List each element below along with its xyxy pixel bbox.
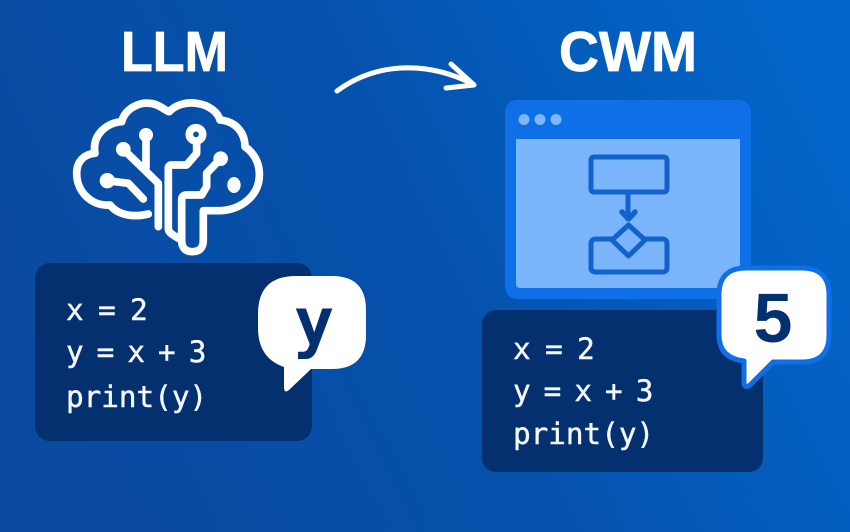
panel: app window [505, 100, 751, 299]
panel: CWM code [482, 310, 763, 472]
panel: LLM code [35, 263, 312, 441]
heading: LLM: LLM [121, 20, 228, 84]
arrow: LLM to CWM [337, 64, 474, 91]
heading: CWM: CWM [559, 20, 697, 84]
callout: y: y [294, 283, 334, 361]
callout: 5 [719, 268, 829, 386]
callout: y [258, 276, 366, 391]
code text: LLM: x = 2 [66, 293, 148, 327]
window content area [516, 139, 740, 288]
code text: CWM [513, 332, 654, 451]
code text: LLM [66, 293, 207, 414]
code text: LLM: y = x + 3 [66, 335, 206, 369]
code text: LLM: print(y) [66, 380, 207, 414]
code text: CWM: print(y) [513, 417, 654, 451]
callout: 5: 5 [754, 279, 792, 357]
icon: flowchart [591, 157, 667, 272]
code text: CWM: y = x + 3 [513, 374, 653, 408]
icon: circuit brain [77, 103, 259, 252]
code text: CWM: x = 2 [513, 332, 595, 366]
window controls [518, 114, 562, 125]
